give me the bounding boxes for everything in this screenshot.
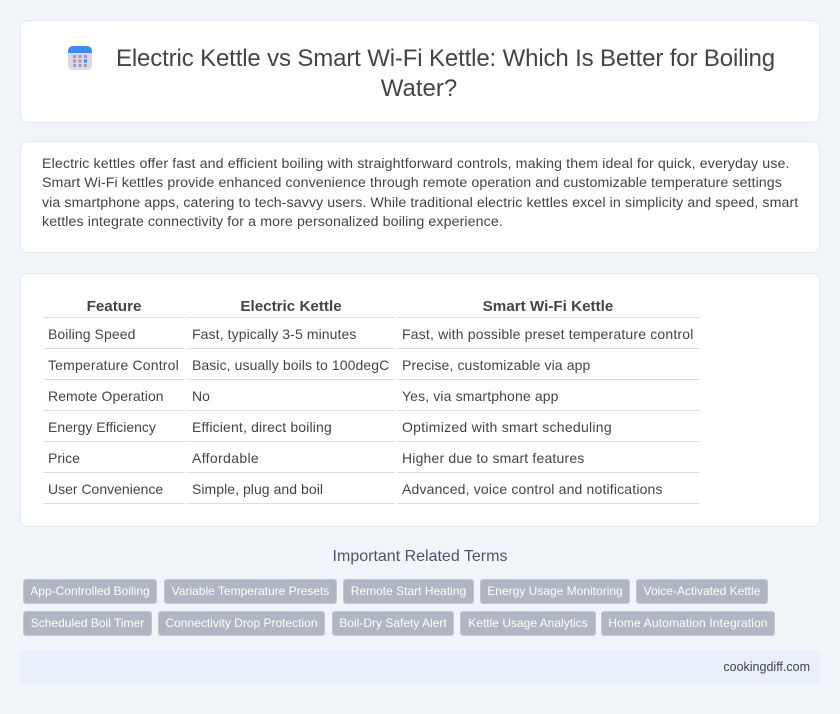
related terms tags: Energy Usage Monitoring — [487, 584, 623, 598]
title: Electric Kettle vs Smart Wi-Fi Kettle: Which Is Better for Boiling — [116, 45, 775, 72]
title — [116, 45, 775, 102]
related terms tags: Boil-Dry Safety Alert — [339, 616, 447, 630]
intro text: via smartphone apps, catering to tech-savvy users. While traditional electric kettles excel in simplicity and speed, smart — [42, 195, 798, 211]
intro text: Electric kettles offer fast and efficient boiling with straightforward controls, making them ideal for quick, everyday use. — [42, 156, 790, 172]
row: temperature control: Temperature Control — [48, 357, 179, 373]
row: remote operation: Remote Operation — [48, 388, 164, 404]
row: temperature control: Precise, customizable via app — [402, 357, 590, 373]
source: cookingdiff.com — [723, 660, 810, 674]
related terms tags: Home Automation Integration — [608, 616, 768, 630]
row: energy efficiency: Efficient, direct boiling — [192, 419, 332, 435]
row: price — [48, 450, 584, 466]
row: user convenience: Advanced, voice control and notifications — [402, 481, 663, 497]
row: boiling speed: Fast, with possible preset temperature control — [402, 326, 694, 342]
row: temperature control — [48, 357, 590, 373]
row: remote operation: Yes, via smartphone app — [402, 388, 559, 404]
row: boiling speed — [48, 326, 694, 342]
table header — [87, 298, 613, 315]
row: price: Affordable — [192, 450, 259, 466]
row: remote operation — [48, 388, 559, 404]
row: temperature control: Basic, usually boils to 100degC — [192, 357, 389, 373]
row: user convenience: Simple, plug and boil — [192, 481, 323, 497]
related terms tags: App-Controlled Boiling — [30, 584, 150, 598]
intro text — [42, 156, 798, 230]
table header: Electric Kettle — [240, 298, 342, 315]
intro text: Smart Wi-Fi kettles provide enhanced convenience through remote operation and customizable temperature settings — [42, 175, 782, 191]
row: energy efficiency: Optimized with smart scheduling — [402, 419, 612, 435]
footer bar — [20, 650, 820, 684]
row: price: Price — [48, 450, 80, 466]
row: user convenience: User Convenience — [48, 481, 163, 497]
related terms heading: Important Related Terms — [333, 548, 507, 565]
row: energy efficiency — [48, 419, 612, 435]
related terms tags: Remote Start Heating — [351, 584, 466, 598]
related terms tags: Kettle Usage Analytics — [468, 616, 588, 630]
table header: Smart Wi-Fi Kettle — [483, 298, 613, 315]
icon: calendar — [68, 46, 92, 70]
row: energy efficiency: Energy Efficiency — [48, 419, 156, 435]
header panel — [20, 20, 820, 123]
row: user convenience — [48, 481, 663, 497]
row: boiling speed: Fast, typically 3-5 minutes — [192, 326, 357, 342]
related terms tags — [23, 579, 775, 636]
row: boiling speed: Boiling Speed — [48, 326, 135, 342]
intro text: kettles integrate connectivity for a more personalized boiling experience. — [42, 214, 503, 230]
table header: Feature — [87, 298, 141, 315]
related terms tags: Scheduled Boil Timer — [31, 616, 144, 630]
comparison table panel — [20, 273, 820, 527]
related terms tags: Voice-Activated Kettle — [644, 584, 760, 598]
intro panel — [20, 141, 820, 253]
related terms tags: Connectivity Drop Protection — [165, 616, 318, 630]
related terms tags: Variable Temperature Presets — [172, 584, 329, 598]
title: Water? — [381, 75, 457, 102]
row: price: Higher due to smart features — [402, 450, 584, 466]
row: remote operation: No — [192, 388, 210, 404]
